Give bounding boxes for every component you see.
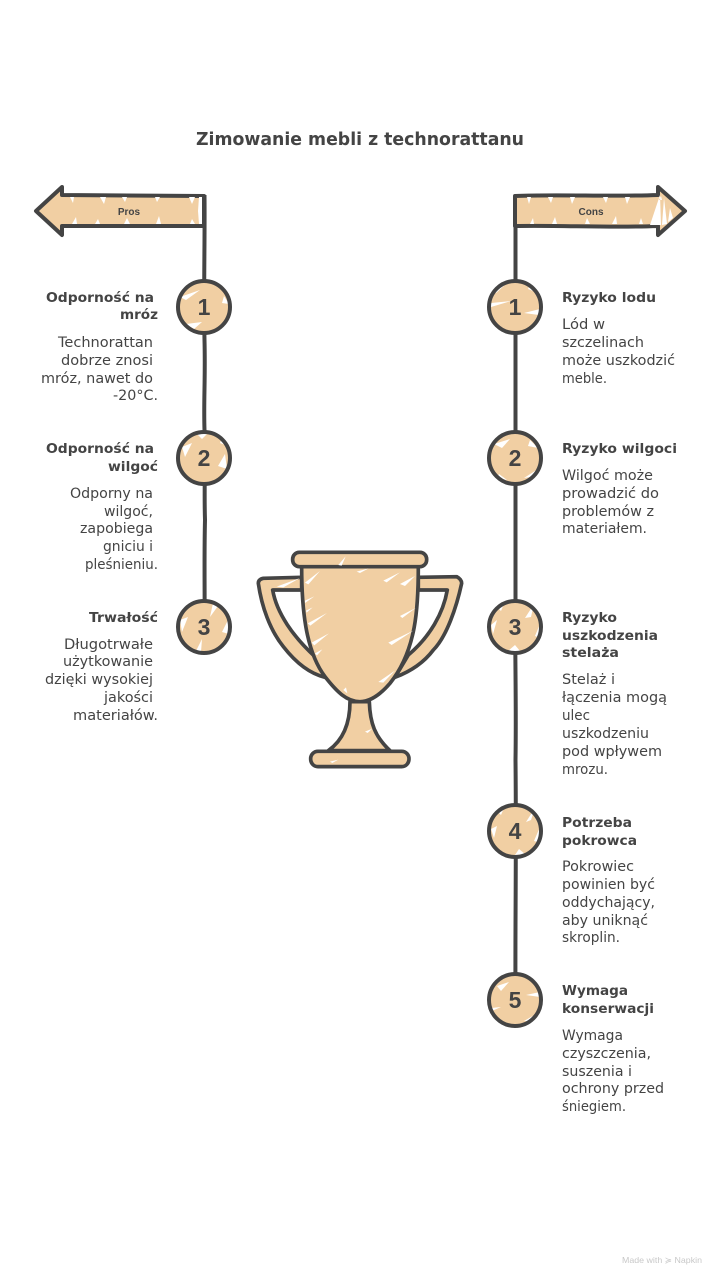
step 3 marker: pros (178, 601, 230, 653)
text block: cons item 1 (562, 290, 675, 387)
text block: pros item 3: Długotrwałe (64, 637, 153, 653)
text block: cons item 5 (562, 983, 664, 1115)
text block: cons item 4: oddychający, (562, 895, 655, 911)
text block: cons item 2: Ryzyko wilgoci (562, 441, 677, 457)
text block: cons item 3: łączenia mogą (562, 690, 667, 706)
text block: pros item 3: Trwałość (89, 610, 158, 626)
step 3 marker: pros: 3 (198, 614, 210, 640)
arrow: pros: Pros (118, 207, 141, 218)
text block: cons item 2: prowadzić do (562, 486, 659, 502)
arrow: pros (36, 187, 204, 235)
step 1 marker: pros (178, 281, 230, 333)
text block: cons item 3: Stelaż i (562, 672, 615, 688)
arrow: cons: Cons (578, 207, 604, 218)
text block: cons item 5: czyszczenia, (562, 1046, 651, 1062)
text block: pros item 2: Odporny na (70, 486, 153, 502)
text block: cons item 3: pod wpływem (562, 744, 662, 760)
footer: made with napkin: Made with ≽ Napkin (622, 1255, 702, 1265)
step 4 marker: cons (489, 805, 541, 857)
text block: pros item 1: Technorattan (57, 335, 153, 351)
text block: cons item 4: aby uniknąć (562, 913, 648, 929)
text block: pros item 1: dobrze znosi (61, 353, 153, 369)
text block: pros item 2 (46, 441, 158, 573)
text block: cons item 5: Wymaga (562, 983, 628, 999)
timeline line: pros (202, 195, 207, 627)
text block: cons item 3 (562, 610, 667, 778)
text block: pros item 3 (45, 610, 158, 724)
text block: cons item 1: Ryzyko lodu (562, 290, 656, 306)
arrow: cons (515, 187, 685, 235)
text block: cons item 5: konserwacji (562, 1001, 654, 1017)
text block: cons item 4: Potrzeba (562, 815, 632, 831)
text block: pros item 2: Odporność na (46, 441, 154, 457)
text block: pros item 2: wilgoć, (104, 504, 153, 520)
text block: pros item 3: dzięki wysokiej (45, 672, 153, 688)
panel: pros timeline (36, 187, 230, 653)
text block: cons item 1: szczelinach (562, 335, 644, 351)
step 2 marker: pros: 2 (198, 445, 210, 471)
step 2 marker: cons (489, 432, 541, 484)
title: Zimowanie mebli z technorattanu (196, 129, 524, 150)
text block: pros item 2: gniciu i (103, 539, 153, 555)
text block: pros item 3: materiałów. (73, 708, 158, 724)
text block: pros item 1: mróz (120, 307, 158, 323)
trophy right handle (395, 577, 462, 677)
text block: cons item 1: Lód w (562, 317, 605, 333)
text block: cons item 2 (562, 441, 677, 537)
step 2 marker: cons: 2 (509, 445, 521, 471)
step 5 marker: cons: 5 (509, 987, 522, 1013)
step 5 marker: cons (489, 974, 541, 1026)
trophy stem (328, 702, 390, 751)
step 3 marker: cons (489, 601, 541, 653)
text block: pros item 1: Odporność na (46, 290, 154, 306)
text block: pros item 3: jakości (103, 690, 153, 706)
step 1 marker: pros: 1 (198, 294, 211, 320)
text block: cons item 3: Ryzyko (562, 610, 617, 626)
text block: cons item 3: mrozu. (562, 762, 608, 778)
text block: pros item 3: użytkowanie (63, 654, 153, 670)
text block: cons item 3: stelaża (562, 645, 619, 661)
text block: cons item 3: ulec (562, 708, 590, 724)
step 1 marker: cons (489, 281, 541, 333)
text block: cons item 3: uszkodzeniu (562, 726, 649, 742)
text block: cons item 4: skroplin. (562, 930, 620, 946)
trophy rim (293, 552, 427, 567)
text block: cons item 4: powinien być (562, 877, 655, 893)
text block: cons item 5: Wymaga (562, 1028, 623, 1044)
trophy highlights (277, 556, 416, 763)
icon: trophy (258, 552, 462, 767)
text block: cons item 5: ochrony przed (562, 1081, 664, 1097)
step 4 marker: cons: 4 (509, 818, 522, 844)
timeline line: cons (513, 195, 518, 1000)
trophy base (311, 751, 409, 767)
step 1 marker: cons: 1 (509, 294, 522, 320)
text block: cons item 5: suszenia i (562, 1064, 632, 1080)
text block: cons item 4: Pokrowiec (562, 859, 634, 875)
trophy left handle (258, 577, 325, 677)
step 2 marker: pros (178, 432, 230, 484)
text block: pros item 1 (41, 290, 158, 404)
text block: pros item 2: wilgoć (108, 459, 158, 475)
text block: pros item 2: zapobiega (80, 521, 153, 537)
text block: cons item 4: pokrowca (562, 833, 637, 849)
text block: cons item 5: śniegiem. (562, 1099, 626, 1115)
step 3 marker: cons: 3 (509, 614, 521, 640)
text block: cons item 3: uszkodzenia (562, 628, 658, 644)
text block: cons item 2: Wilgoć może (562, 468, 653, 484)
panel: cons timeline (489, 187, 685, 1026)
text block: pros item 2: pleśnieniu. (85, 557, 158, 573)
text block: pros item 1: mróz, nawet do (41, 371, 153, 387)
text block: cons item 2: problemów z (562, 504, 654, 520)
text block: cons item 2: materiałem. (562, 521, 647, 537)
trophy cup (302, 567, 418, 702)
text block: cons item 1: meble. (562, 371, 607, 387)
text block: cons item 4 (562, 815, 655, 946)
text block: cons item 1: może uszkodzić (562, 353, 675, 369)
text block: pros item 1: -20°C. (113, 388, 158, 404)
